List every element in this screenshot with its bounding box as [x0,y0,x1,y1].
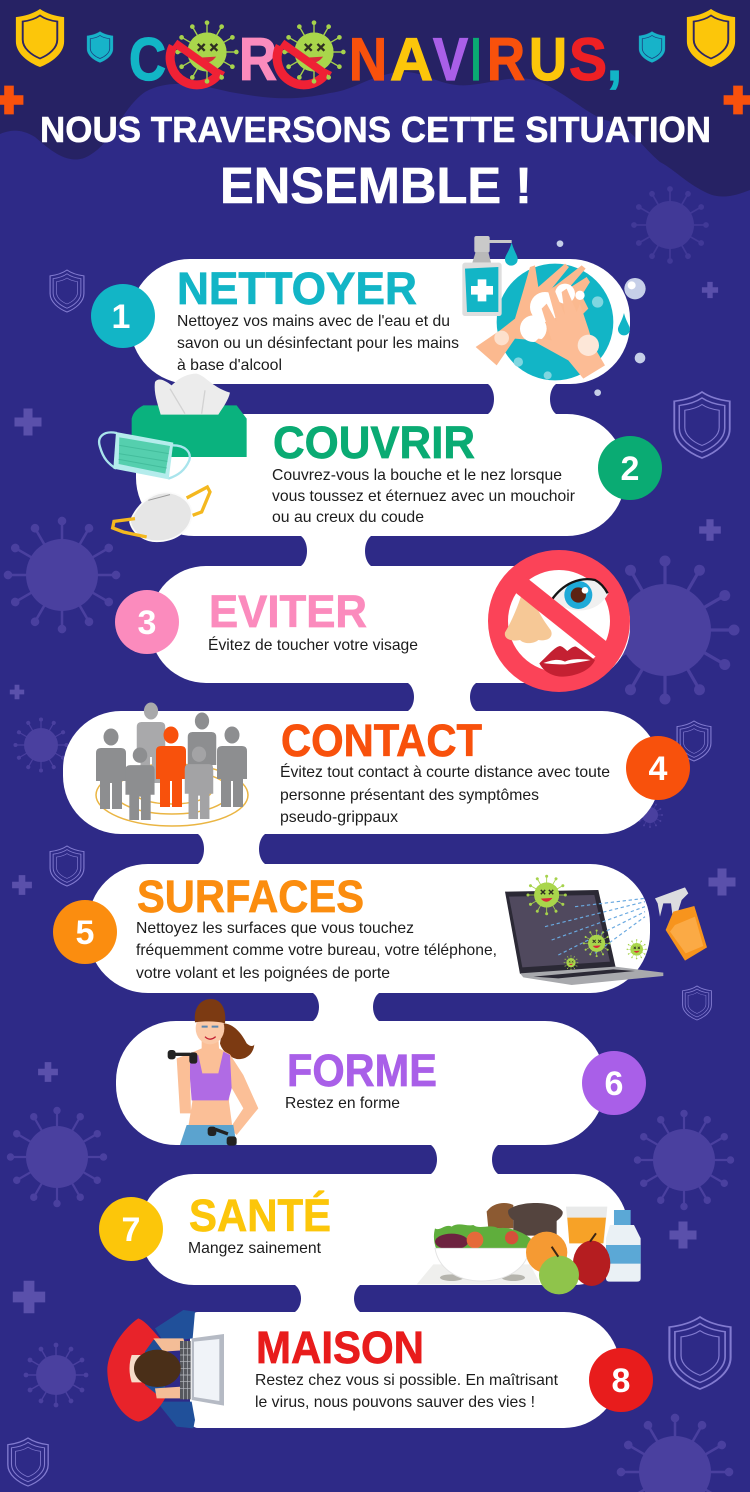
icon: eye [552,579,608,610]
number badge 5 [53,900,117,964]
icon: orange cross left [0,86,23,114]
header dark wave [0,0,750,196]
icon: crowd with infected person [96,702,248,826]
text: forme: Restez en forme [285,1095,400,1112]
number badge 3: 3 [138,604,156,642]
text: contact: personne présentant des symptômes [280,787,539,804]
title: coronavirus: S [569,26,607,93]
icon: lips [539,646,595,677]
panel: contact [96,702,690,826]
subtitle emphasis: ENSEMBLE ! [220,157,532,214]
title: coronavirus: R [487,26,525,93]
panel: forme [168,999,646,1146]
panel: surfaces [53,871,707,985]
icon: surgical mask [99,432,190,479]
icon: crossed-out virus 1 [170,20,239,85]
title: coronavirus: N [349,26,387,93]
text: maison: le virus, nous pouvons sauver des vies ! [255,1394,535,1411]
icon: sanitizer bottle [462,236,518,316]
panel: couvrir [99,374,662,541]
text: couvrir: Couvrez-vous la bouche et le nez lorsque [272,467,562,484]
icon: crossed-out virus 2 [277,20,346,85]
heading: maison: MAISON [256,1322,424,1373]
icon: hand washing [476,264,613,380]
connected white panels [63,259,660,1428]
heading: couvrir: COUVRIR [273,417,475,468]
number badge 2 [598,436,662,500]
text: couvrir [272,467,576,526]
text: surfaces: votre volant et les poignées de porte [136,965,390,982]
icon: do not touch face [498,560,620,682]
text: contact: pseudo-grippaux [280,809,398,826]
icon: small teal shield left [87,32,113,62]
number badge 6: 6 [605,1065,623,1103]
icon: person at laptop seen from above [107,1310,224,1428]
text: nettoyer: à base d'alcool [177,357,282,374]
text: maison [255,1372,559,1411]
text: couvrir: vous toussez et éternuez avec un mouchoir [272,488,576,505]
icon: yellow shield right [687,9,735,67]
icon: water bubbles [557,240,646,396]
title: coronavirus: C [129,26,166,93]
number badge 6 [582,1051,646,1115]
number badge 4 [626,736,690,800]
text: contact: Évitez tout contact à courte distance avec toute [280,762,610,781]
number badge 7 [99,1197,163,1261]
number badge 4: 4 [649,750,668,788]
panel: maison [107,1310,653,1428]
icon: small teal shield right [639,32,665,62]
title: coronavirus: I [471,26,481,93]
title: coronavirus: V [433,26,468,93]
heading: nettoyer: NETTOYER [177,263,417,314]
title: coronavirus: , [607,26,622,93]
number badge 2: 2 [621,450,639,488]
heading: forme: FORME [287,1045,437,1096]
text: nettoyer [177,313,459,374]
title: coronavirus [129,20,622,93]
icon: n95 mask [113,487,210,541]
panel: nettoyer [91,236,646,396]
heading: contact: CONTACT [281,715,482,766]
icon: tissue box [132,374,247,457]
heading: eviter: EVITER [209,586,367,637]
text: sante: Mangez sainement [188,1240,322,1257]
number badge 1 [91,284,155,348]
text: surfaces: Nettoyez les surfaces que vous touchez [136,920,414,937]
text: surfaces [136,920,497,982]
panel: sante [99,1190,641,1294]
text: nettoyer: savon ou un désinfectant pour les mains [177,335,459,352]
text: couvrir: ou au creux du coude [272,509,424,526]
text: surfaces: fréquemment comme votre bureau, votre téléphone, [136,942,497,959]
icon: healthy food [417,1203,641,1294]
icon: spray bottle [655,887,707,961]
text: nettoyer: Nettoyez vos mains avec de l'eau et du [177,313,450,330]
title: coronavirus: R [239,26,277,93]
heading: sante: SANTÉ [189,1190,331,1241]
subtitle: NOUS TRAVERSONS CETTE SITUATION [40,109,711,150]
icon: nose [505,588,552,643]
number badge 8 [589,1348,653,1412]
title: coronavirus: A [390,26,433,93]
number badge 3 [115,590,179,654]
number badge 7: 7 [122,1211,140,1249]
icon: laptop with viruses [505,875,663,985]
panel: eviter [115,560,620,682]
number badge 8: 8 [612,1362,630,1400]
icon: orange cross right [724,86,750,114]
title: coronavirus: U [529,26,567,93]
heading: surfaces: SURFACES [137,871,364,922]
text: eviter: Évitez de toucher votre visage [208,635,418,654]
text: contact [280,762,610,826]
number badge 5: 5 [76,914,94,952]
icon: woman exercising [168,999,258,1146]
text: maison: Restez chez vous si possible. En maîtrisant [255,1372,559,1389]
icon: yellow shield left [16,9,64,67]
number badge 1: 1 [112,298,130,336]
